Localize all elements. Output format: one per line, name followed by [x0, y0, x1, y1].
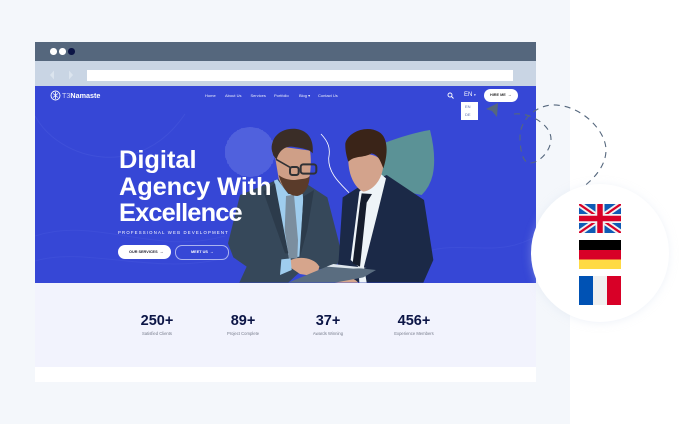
title bar [35, 42, 536, 61]
meet us button [175, 245, 229, 260]
icon: search [448, 92, 454, 99]
leaf shape [382, 130, 434, 195]
stat: satisfied clients: 250+ [141, 313, 173, 329]
hero headline [119, 146, 271, 226]
language dropdown: EN [465, 104, 471, 109]
hero panel [35, 86, 536, 283]
address bar [35, 61, 536, 86]
language dropdown [461, 102, 478, 120]
our services button: OUR SERVICES → [129, 250, 164, 254]
man on the right [333, 129, 433, 283]
logo text: T3Namaste [62, 91, 100, 100]
stat: satisfied clients [141, 313, 173, 336]
icon: cursor arrow [486, 103, 498, 117]
our services button [118, 245, 171, 259]
stat: project complete: 89+ [231, 313, 255, 329]
stat: awards winning: 37+ [316, 313, 340, 329]
navigation menu: Portfolio [274, 93, 289, 98]
meet us button: MEET US → [191, 250, 214, 254]
stat: project complete: Project Complete [227, 331, 259, 336]
browser window [35, 42, 536, 382]
stat: experience members [394, 313, 434, 336]
language dropdown: DE [465, 112, 471, 117]
flag: United Kingdom [579, 204, 621, 233]
stat: experience members: 456+ [398, 313, 430, 329]
hero decorations [35, 114, 274, 177]
man on the left [228, 129, 343, 283]
logo [50, 90, 100, 100]
photo: two businessmen [228, 128, 434, 283]
flag: Germany [579, 240, 621, 269]
logo icon [50, 90, 60, 100]
stat: awards winning: Awards Winning [313, 331, 343, 336]
navigation menu: Blog ▾ [299, 93, 310, 98]
hire me button [484, 89, 518, 102]
hero subtitle: PROFESSIONAL WEB DEVELOPMENT [118, 230, 229, 235]
hero headline: Agency With [119, 172, 271, 200]
hire me button: HIRE ME → [490, 93, 512, 97]
hero headline: Digital [119, 146, 197, 174]
stat: awards winning [312, 313, 343, 336]
navigation menu [205, 93, 338, 98]
navigation menu: Contact Us [318, 93, 338, 98]
stats panel [35, 283, 536, 367]
stat: experience members: Experience Members [394, 331, 434, 336]
hero headline: Excellence [119, 198, 242, 226]
clipboard [288, 265, 376, 283]
window control dots [50, 48, 75, 55]
language selector: EN ▾ [464, 92, 476, 98]
flag: France [579, 276, 621, 305]
stat: project complete [227, 313, 259, 336]
navigation menu: About Us [225, 93, 241, 98]
back and forward arrows [50, 71, 73, 79]
stat: satisfied clients: Satisfied Clients [142, 331, 172, 336]
navigation menu: Home [205, 93, 216, 98]
white curved line [321, 134, 349, 193]
navigation menu: Services [250, 93, 266, 98]
url field [87, 70, 513, 81]
flags circle [531, 184, 669, 322]
dashed loop arrow [514, 104, 606, 185]
